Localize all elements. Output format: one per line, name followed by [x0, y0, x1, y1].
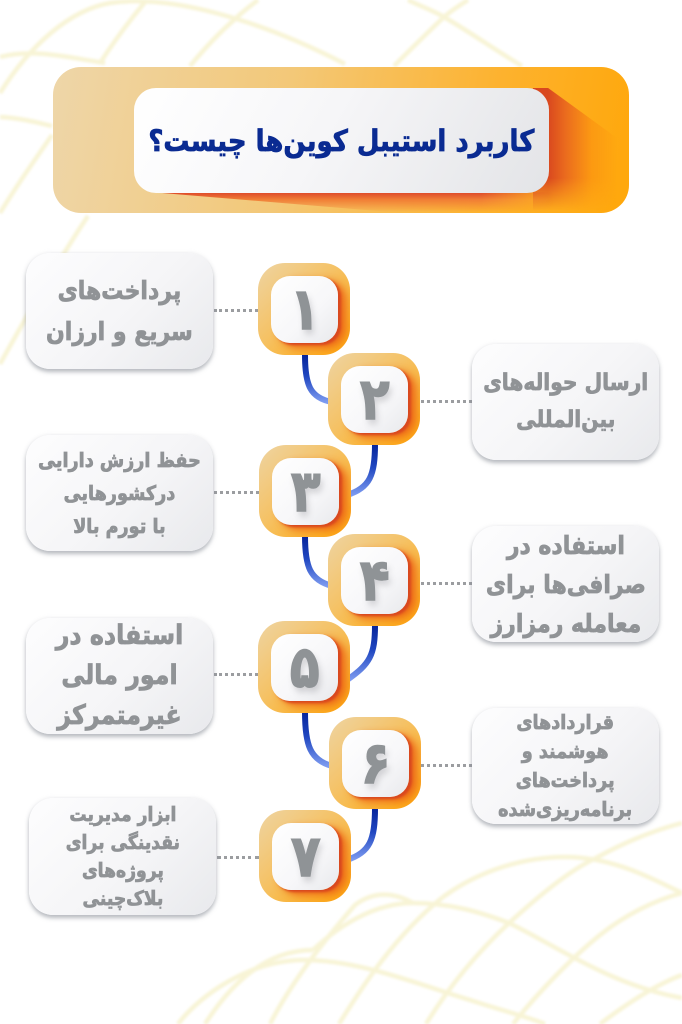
step 5 number tile: [258, 621, 350, 713]
header title card: کاربرد استیبل کوین‌ها چیست؟: [148, 124, 534, 158]
step 2 number tile: ۲: [360, 365, 389, 433]
step 6 number tile: [329, 717, 421, 809]
header title card: [134, 88, 549, 193]
card 3: preserving value under inflation: با تورم بالا: [73, 514, 166, 538]
card 4: exchanges and crypto trading: [472, 526, 659, 642]
card 7: liquidity tool for blockchain projects: نقدینگی برای: [65, 830, 180, 854]
card 4: exchanges and crypto trading: معامله رمزارز: [490, 608, 641, 638]
dotted leader: step 6: [421, 764, 472, 767]
card 7: liquidity tool for blockchain projects: بلاک‌چینی: [82, 886, 163, 910]
card 3: preserving value under inflation: درکشورهایی: [64, 480, 175, 504]
step 7 number tile: ۷: [291, 822, 320, 890]
card 2: international remittances: ارسال حواله‌های: [483, 370, 648, 396]
step 1 number tile: [258, 263, 350, 355]
step 3 number tile: ۳: [291, 457, 320, 525]
card 3: preserving value under inflation: حفظ ارزش دارایی: [38, 448, 201, 472]
step 6 number tile: ۶: [361, 729, 390, 797]
step 5 number tile: ۵: [290, 633, 319, 701]
card 1: fast and cheap payments: سریع و ارزان: [46, 317, 193, 346]
card 2: international remittances: [472, 344, 659, 460]
card 7: liquidity tool for blockchain projects: پروژه‌های: [82, 858, 163, 882]
card 5: decentralized finance: استفاده در: [56, 620, 183, 651]
card 5: decentralized finance: غیرمتمرکز: [57, 700, 182, 731]
card 2: international remittances: بین‌المللی: [516, 407, 615, 433]
card 6: smart contracts and programmed payments: [472, 708, 659, 824]
dotted leader: step 7: [217, 856, 259, 859]
header banner: [53, 67, 629, 213]
step 4 number tile: ۴: [360, 546, 389, 614]
card 7: liquidity tool for blockchain projects: ابزار مدیریت: [69, 802, 176, 826]
card 6: smart contracts and programmed payments: قراردادهای: [517, 710, 614, 734]
step 2 number tile: [328, 353, 420, 445]
dotted leader: step 5: [214, 673, 258, 676]
card 3: preserving value under inflation: [26, 435, 213, 551]
dotted leader: step 2: [421, 400, 472, 403]
card 6: smart contracts and programmed payments: هوشمند و: [522, 739, 609, 763]
card 4: exchanges and crypto trading: استفاده در: [506, 530, 625, 560]
dotted leader: step 3: [214, 491, 259, 494]
card 4: exchanges and crypto trading: صرافی‌ها برای: [486, 570, 645, 598]
step 1 number tile: ۱: [290, 275, 319, 343]
step 3 number tile: [259, 445, 351, 537]
card 7: liquidity tool for blockchain projects: [29, 798, 216, 915]
card 5: decentralized finance: [26, 618, 213, 734]
card 1: fast and cheap payments: [26, 253, 213, 369]
dotted leader: step 4: [421, 582, 472, 585]
step 4 number tile: [328, 534, 420, 626]
step 7 number tile: [259, 810, 351, 902]
card 1: fast and cheap payments: پرداخت‌های: [58, 276, 181, 305]
card 6: smart contracts and programmed payments: برنامه‌ریزی‌شده: [498, 797, 633, 821]
card 5: decentralized finance: امور مالی: [61, 660, 178, 691]
card 6: smart contracts and programmed payments: پرداخت‌های: [516, 768, 615, 792]
dotted leader: step 1: [214, 309, 258, 312]
